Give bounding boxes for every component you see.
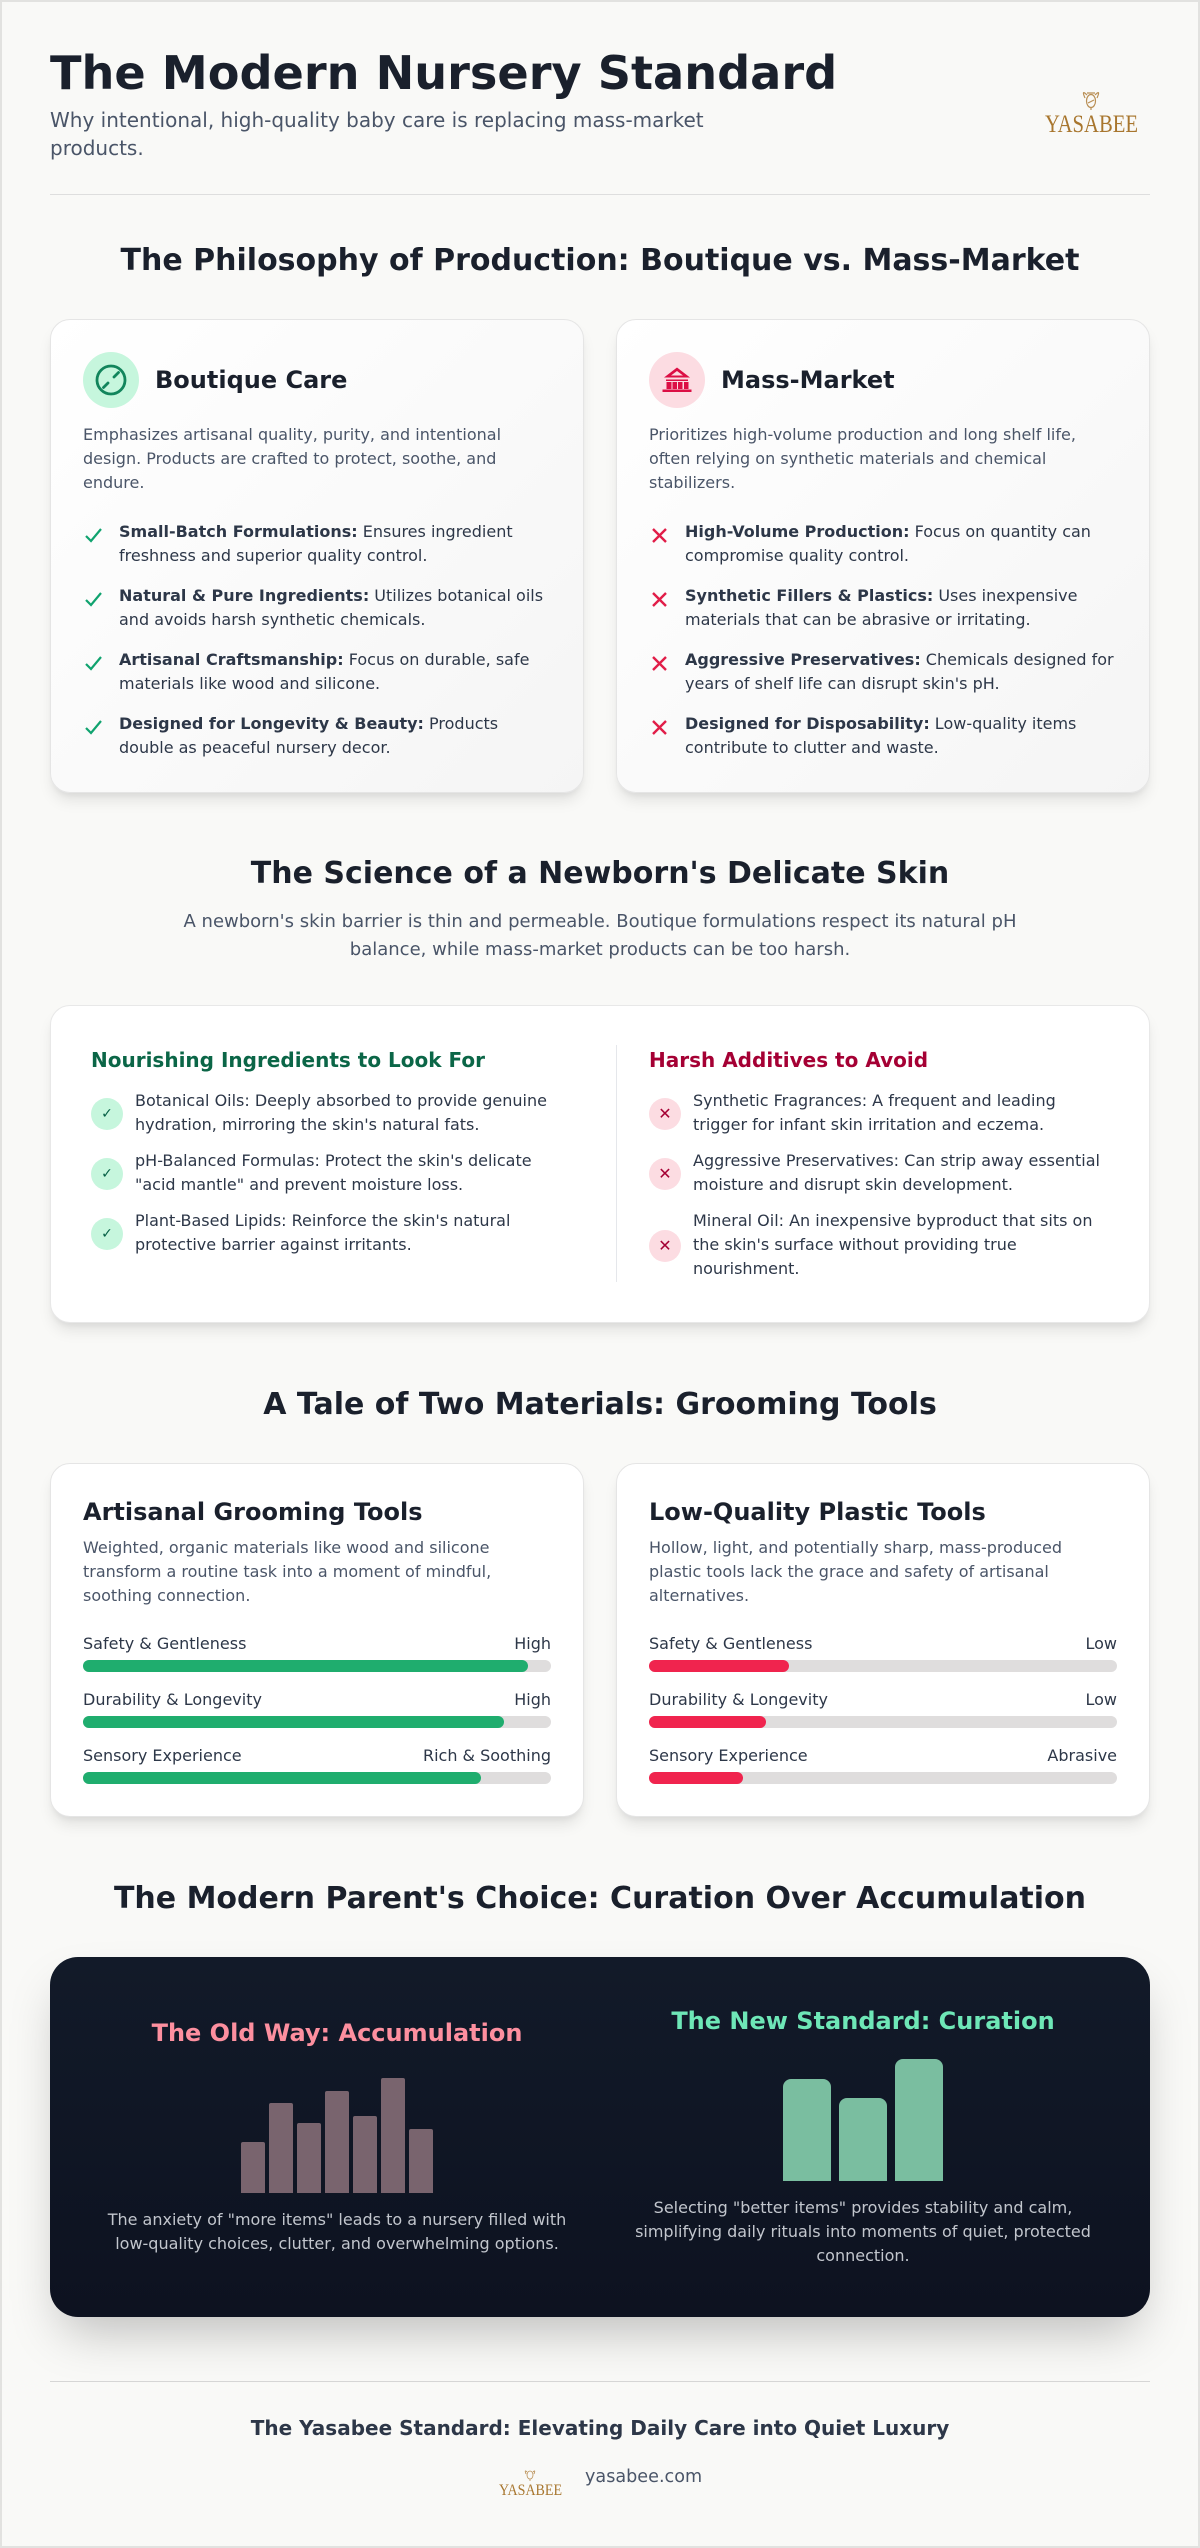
- icon: factory building: [649, 352, 705, 408]
- skin science intro: [184, 911, 1016, 960]
- artisanal meters: Rich & Soothing: [423, 1746, 551, 1765]
- ingredient: botanical oils: hydration, mirroring the skin's natural fats.: [135, 1115, 479, 1134]
- boutique description: Emphasizes artisanal quality, purity, and intentional: [83, 425, 501, 444]
- panel: boutique care: [50, 319, 584, 793]
- icon: cross: ✕: [658, 1164, 672, 1183]
- boutique benefits list: and avoids harsh synthetic chemicals.: [119, 610, 425, 629]
- mass-market header: Mass-Market: [721, 366, 895, 394]
- ingredient: botanical oils: [135, 1091, 547, 1134]
- artisanal meters: High: [514, 1690, 551, 1709]
- boutique benefits list: freshness and superior quality control.: [119, 546, 427, 565]
- additive: mineral oil: the skin's surface without providing true: [693, 1235, 1017, 1254]
- mass-market drawbacks list: compromise quality control.: [685, 546, 909, 565]
- icon: check: ✓: [101, 1226, 113, 1242]
- mass-market drawbacks list: years of shelf life can disrupt skin's pH.: [685, 674, 1000, 693]
- panel: mass-market: [616, 319, 1150, 793]
- old way description: The anxiety of "more items" leads to a nursery filled with: [108, 2210, 566, 2229]
- boutique description: endure.: [83, 473, 144, 492]
- mass-market drawbacks list: materials that can be abrasive or irritating.: [685, 610, 1031, 629]
- ingredient: ph-balanced: pH-Balanced Formulas: Protect the skin's delicate: [135, 1151, 532, 1170]
- mass-market drawbacks list: High-Volume Production: Focus on quantity can: [685, 522, 1091, 541]
- additive: preservatives: moisture and disrupt skin development.: [693, 1175, 1013, 1194]
- mass-market drawbacks list: [652, 522, 1114, 757]
- new standard title: The New Standard: Curation: [671, 2007, 1055, 2035]
- artisanal description: Weighted, organic materials like wood and silicone: [83, 1538, 489, 1557]
- plastic meters: Abrasive: [1047, 1746, 1117, 1765]
- skin science intro: balance, while mass-market products can be too harsh.: [350, 939, 850, 960]
- icon: check: ✓: [101, 1166, 113, 1182]
- additive: preservatives: Aggressive Preservatives: Can strip away essential: [693, 1151, 1100, 1170]
- plastic description: plastic tools lack the grace and safety of artisanal: [649, 1562, 1049, 1581]
- mass-market description: stabilizers.: [649, 473, 735, 492]
- additive: fragrances: [693, 1091, 1056, 1134]
- plastic description: alternatives.: [649, 1586, 749, 1605]
- chart: accumulation bars: [241, 2078, 433, 2193]
- artisanal description: transform a routine task into a moment of mindful,: [83, 1562, 491, 1581]
- new standard description: Selecting "better items" provides stability and calm,: [654, 2198, 1072, 2217]
- plastic meters: Safety & Gentleness: [649, 1634, 812, 1653]
- icon: boutique: [83, 352, 139, 408]
- artisanal title: Artisanal Grooming Tools: [83, 1498, 422, 1526]
- plastic meters: Durability & Longevity: [649, 1690, 828, 1709]
- icon: cross: ✕: [658, 1104, 672, 1123]
- boutique benefits list: double as peaceful nursery decor.: [119, 738, 391, 757]
- boutique description: design. Products are crafted to protect, soothe, and: [83, 449, 496, 468]
- chart: curation bars: [783, 2059, 943, 2181]
- heading: philosophy of production: The Philosophy of Production: Boutique vs. Mass-Market: [121, 243, 1079, 278]
- icon: check: [91, 1218, 123, 1250]
- ingredient: plant lipids: protective barrier against irritants.: [135, 1235, 412, 1254]
- skin science intro: A newborn's skin barrier is thin and permeable. Boutique formulations respect its natural pH: [184, 911, 1016, 932]
- boutique benefits list: materials like wood and silicone.: [119, 674, 380, 693]
- additive: mineral oil: Mineral Oil: An inexpensive byproduct that sits on: [693, 1211, 1092, 1230]
- artisanal meters: [83, 1634, 551, 1784]
- additive: mineral oil: nourishment.: [693, 1259, 800, 1278]
- mass-market drawbacks list: Designed for Disposability: Low-quality items: [685, 714, 1076, 733]
- artisanal meters: Safety & Gentleness: [83, 1634, 246, 1653]
- boutique benefits list: Small-Batch Formulations: Ensures ingredient: [119, 522, 513, 541]
- ingredient: plant lipids: Plant-Based Lipids: Reinforce the skin's natural: [135, 1211, 510, 1230]
- heading: harsh additives: Harsh Additives to Avoid: [649, 1048, 928, 1072]
- plastic meters: Sensory Experience: [649, 1746, 808, 1765]
- mass-market drawbacks list: Aggressive Preservatives: Chemicals designed for: [685, 650, 1114, 669]
- mass-market drawbacks list: Synthetic Fillers & Plastics: Uses inexpensive: [685, 586, 1077, 605]
- icon: cross: [649, 1230, 681, 1262]
- icon: check: [91, 1158, 123, 1190]
- heading: grooming tools: A Tale of Two Materials: Grooming Tools: [263, 1387, 937, 1422]
- additive: preservatives: [693, 1151, 1100, 1194]
- title: The Modern Nursery Standard: [50, 46, 837, 100]
- plastic meters: Low: [1085, 1634, 1117, 1653]
- boutique benefits list: [85, 522, 543, 757]
- artisanal description: soothing connection.: [83, 1586, 250, 1605]
- mass-market drawbacks list: contribute to clutter and waste.: [685, 738, 939, 757]
- ingredient: botanical oils: Botanical Oils: Deeply absorbed to provide genuine: [135, 1091, 547, 1110]
- additive: fragrances: trigger for infant skin irritation and eczema.: [693, 1115, 1044, 1134]
- heading: newborn skin science: The Science of a Newborn's Delicate Skin: [251, 856, 949, 891]
- plastic meters: Low: [1085, 1690, 1117, 1709]
- subtitle: products.: [50, 136, 144, 160]
- artisanal meters: Durability & Longevity: [83, 1690, 262, 1709]
- icon: cross: [649, 1158, 681, 1190]
- logo: Yasabee header: [1045, 92, 1138, 136]
- additive: fragrances: Synthetic Fragrances: A frequent and leading: [693, 1091, 1056, 1110]
- artisanal description: [83, 1538, 491, 1605]
- subtitle: [50, 108, 704, 160]
- ingredient: ph-balanced: "acid mantle" and prevent moisture loss.: [135, 1175, 463, 1194]
- icon: cross: [649, 1098, 681, 1130]
- panel: ingredients comparison: [50, 1005, 1150, 1323]
- boutique header: Boutique Care: [155, 366, 347, 394]
- mass-market description: often relying on synthetic materials and chemical: [649, 449, 1046, 468]
- subtitle: Why intentional, high-quality baby care is replacing mass-market: [50, 108, 704, 132]
- artisanal meters: High: [514, 1634, 551, 1653]
- boutique description: [83, 425, 501, 492]
- additive: mineral oil: [693, 1211, 1092, 1278]
- old way description: [108, 2210, 566, 2253]
- old way title: The Old Way: Accumulation: [152, 2019, 522, 2047]
- logo: Yasabee footer: [499, 2470, 562, 2498]
- mass-market description: Prioritizes high-volume production and long shelf life,: [649, 425, 1076, 444]
- plastic description: Hollow, light, and potentially sharp, mass-produced: [649, 1538, 1062, 1557]
- boutique benefits list: Artisanal Craftsmanship: Focus on durable, safe: [119, 650, 529, 669]
- old way description: low-quality choices, clutter, and overwhelming options.: [115, 2234, 559, 2253]
- boutique benefits list: Natural & Pure Ingredients: Utilizes botanical oils: [119, 586, 543, 605]
- new standard description: [635, 2198, 1091, 2265]
- boutique benefits list: Designed for Longevity & Beauty: Products: [119, 714, 498, 733]
- heading: nourishing ingredients: Nourishing Ingredients to Look For: [91, 1048, 485, 1072]
- footer website: yasabee.com: [585, 2467, 702, 2487]
- plastic meters: [649, 1634, 1117, 1784]
- icon: check: [91, 1098, 123, 1130]
- plastic description: [649, 1538, 1062, 1605]
- footer tagline: The Yasabee Standard: Elevating Daily Care into Quiet Luxury: [251, 2416, 949, 2440]
- new standard description: connection.: [816, 2246, 910, 2265]
- new standard description: simplifying daily rituals into moments of quiet, protected: [635, 2222, 1091, 2241]
- ingredient: ph-balanced: [135, 1151, 532, 1194]
- boutique header: [83, 352, 347, 408]
- plastic title: Low-Quality Plastic Tools: [649, 1498, 986, 1526]
- panel: old way vs new standard: [50, 1957, 1150, 2317]
- ingredient: plant lipids: [135, 1211, 510, 1254]
- panel: plastic tools: [616, 1463, 1150, 1817]
- heading: parent's choice: The Modern Parent's Choice: Curation Over Accumulation: [114, 1881, 1086, 1916]
- mass-market description: [649, 425, 1076, 492]
- panel: artisanal tools: [50, 1463, 584, 1817]
- artisanal meters: Sensory Experience: [83, 1746, 242, 1765]
- mass-market header: [649, 352, 895, 408]
- icon: cross: ✕: [658, 1236, 672, 1255]
- icon: check: ✓: [101, 1106, 113, 1122]
